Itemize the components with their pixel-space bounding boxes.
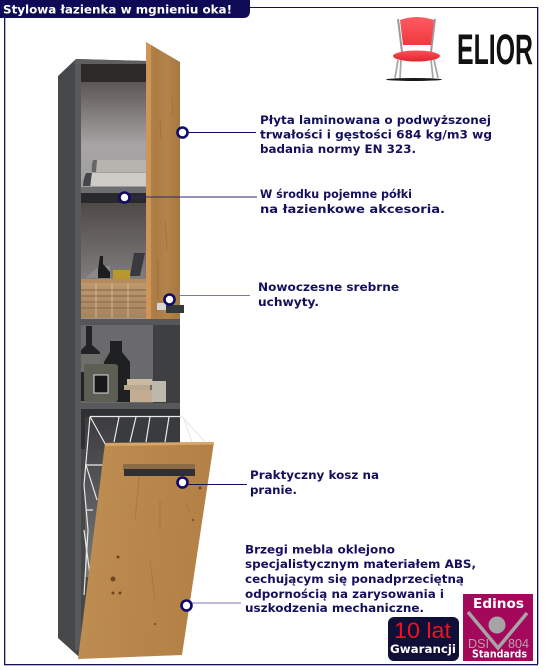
hamper handle <box>123 464 195 476</box>
text: pranie. <box>250 483 297 497</box>
badge: 10 year guarantee <box>388 617 459 661</box>
callout: ABS edges <box>182 542 476 615</box>
text: odpornością na zarysowania i <box>245 587 444 601</box>
callout: laminated board <box>178 113 492 156</box>
title banner <box>0 0 250 18</box>
text: Nowoczesne srebrne <box>258 280 399 294</box>
text: Brzegi mebla oklejono <box>245 542 395 556</box>
callout: handles <box>164 280 399 309</box>
connector <box>178 478 247 488</box>
middle shelf and lower compartment <box>81 319 180 449</box>
logo: ELIOR chair <box>386 17 533 81</box>
badge: 10 year guarantee: Gwarancji <box>390 642 456 656</box>
text: W środku pojemne półki <box>260 187 412 201</box>
upper compartment <box>81 64 146 320</box>
door handle <box>157 303 184 313</box>
wire laundry basket <box>84 416 205 595</box>
cabinet carcass <box>58 59 180 656</box>
badge: Edinos DSI 804 Standards: DSI <box>468 636 489 651</box>
door (open) <box>146 42 180 325</box>
hamper door <box>78 442 214 659</box>
text: uszkodzenia mechaniczne. <box>245 601 424 615</box>
basket with cosmetics <box>81 253 146 318</box>
callout: laundry basket <box>178 468 379 497</box>
connector <box>120 192 257 202</box>
badge: Edinos DSI 804 Standards: Edinos <box>473 596 524 612</box>
text: cechującym się ponadprzeciętną <box>245 572 464 586</box>
badge: Edinos DSI 804 Standards: 804 <box>508 636 529 651</box>
connector <box>182 600 241 610</box>
connector <box>178 128 256 138</box>
title banner: Stylowa łazienka w mgnieniu oka! <box>3 2 232 16</box>
connector <box>164 294 250 304</box>
text: uchwyty. <box>258 295 319 309</box>
text: specjalistycznym materiałem ABS, <box>245 557 476 571</box>
folded towels <box>83 160 146 186</box>
text: Praktyczny kosz na <box>250 468 379 482</box>
badge: 10 year guarantee: 10 lat <box>394 618 451 643</box>
callout: shelves <box>120 187 445 216</box>
badge: Edinos DSI 804 Standards: Standards <box>472 648 527 660</box>
text: badania normy EN 323. <box>260 142 416 156</box>
bottles and candle <box>81 326 130 402</box>
text: Płyta laminowana o podwyższonej <box>260 113 491 127</box>
stacked soap boxes <box>124 379 166 402</box>
text: na łazienkowe akcesoria. <box>260 202 445 216</box>
badge: Edinos DSI 804 Standards <box>463 594 533 661</box>
text: trwałości i gęstości 684 kg/m3 wg <box>260 128 492 142</box>
icon: red chair <box>386 17 442 81</box>
cabinet illustration <box>58 42 214 659</box>
